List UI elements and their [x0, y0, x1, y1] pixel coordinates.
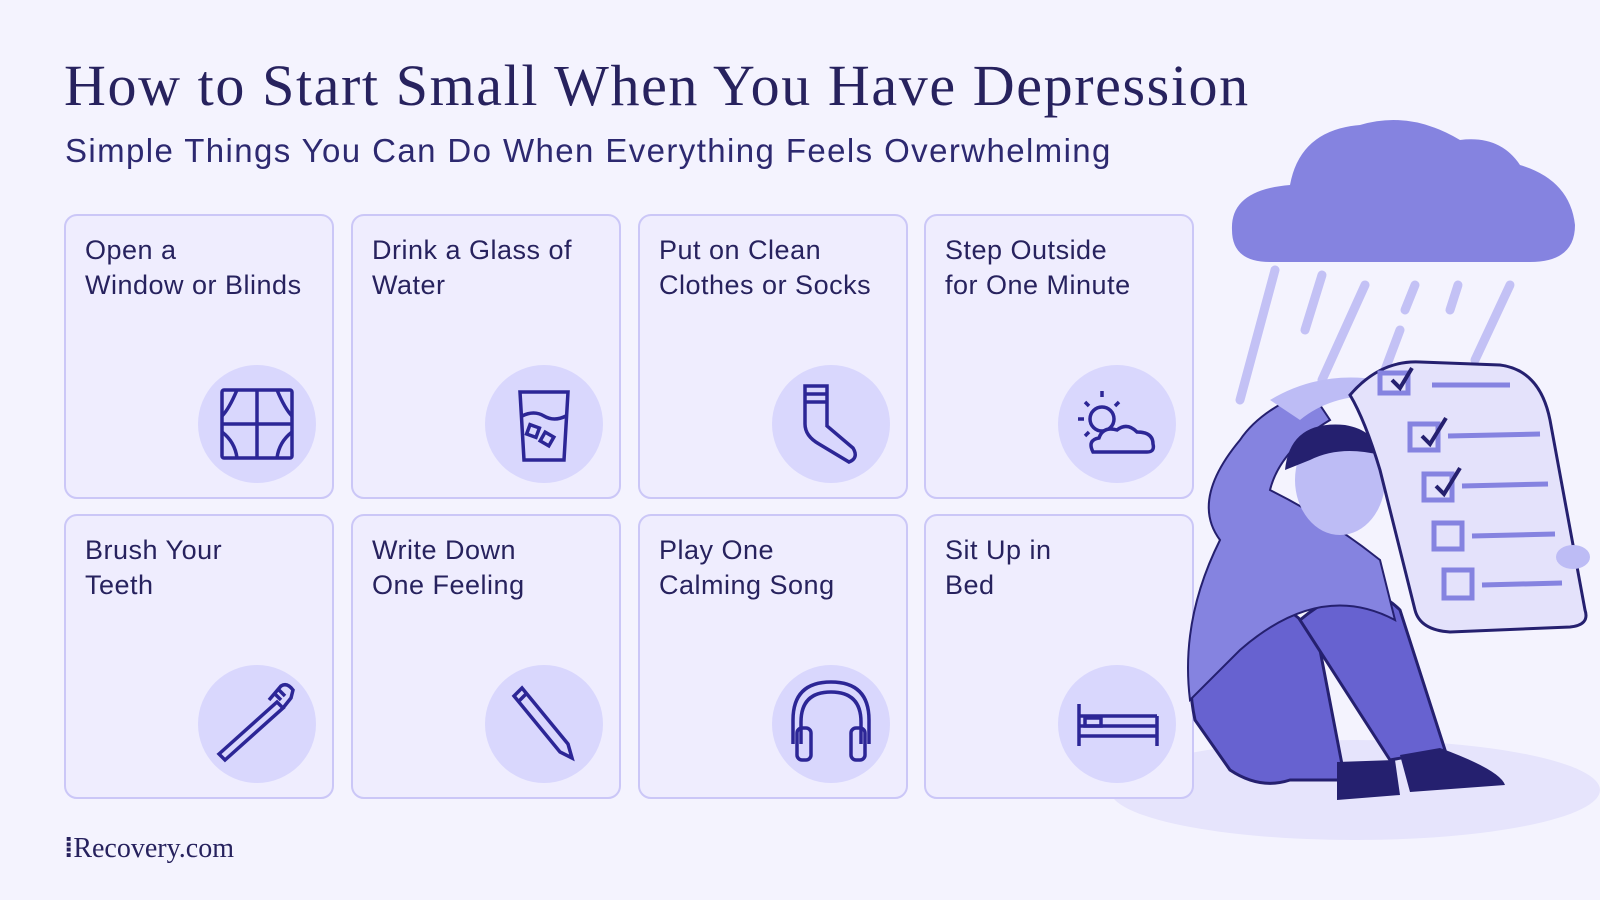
icon: headphones — [772, 665, 890, 783]
card: outside: for One Minute — [945, 270, 1131, 300]
icon: sun cloud — [1058, 365, 1176, 483]
subtitle: Simple Things You Can Do When Everything Feels Overwhelming — [65, 132, 1112, 169]
card: outside: Step Outside — [945, 235, 1107, 265]
card: socks — [638, 214, 908, 499]
card: water: Drink a Glass of — [372, 235, 572, 265]
card: teeth — [64, 514, 334, 799]
card: song: Calming Song — [659, 570, 835, 600]
icon: pencil — [485, 665, 603, 783]
icon: sock — [772, 365, 890, 483]
checklist paper — [1350, 362, 1586, 632]
torso and arm — [1188, 390, 1395, 700]
card: bed: Bed — [945, 570, 995, 600]
shoes — [1337, 760, 1400, 800]
card: bed — [924, 514, 1194, 799]
card: song: Play One — [659, 535, 774, 565]
title: How to Start Small When You Have Depression — [64, 53, 1250, 118]
card: water — [351, 214, 621, 499]
card: teeth: Teeth — [85, 570, 154, 600]
card: bed: Sit Up in — [945, 535, 1052, 565]
card: write: One Feeling — [372, 570, 525, 600]
legs — [1191, 605, 1345, 783]
hand holding paper — [1556, 545, 1590, 569]
hand on head — [1270, 378, 1380, 420]
head — [1295, 425, 1385, 535]
card: write: Write Down — [372, 535, 516, 565]
logo: ⁞Recovery.com — [64, 832, 234, 864]
card: socks: Put on Clean — [659, 235, 821, 265]
icon: bed — [1058, 665, 1176, 783]
card: song — [638, 514, 908, 799]
card: write — [351, 514, 621, 799]
card: socks: Clothes or Socks — [659, 270, 871, 300]
icon: toothbrush — [198, 665, 316, 783]
rain — [1240, 270, 1510, 400]
card: window: Open a — [85, 235, 177, 265]
cloud — [1232, 120, 1575, 262]
icon: glass — [485, 365, 603, 483]
card: outside — [924, 214, 1194, 499]
icon: window — [198, 365, 316, 483]
card: water: Water — [372, 270, 446, 300]
card: window — [64, 214, 334, 499]
card: window: Window or Blinds — [85, 270, 302, 300]
card: teeth: Brush Your — [85, 535, 222, 565]
